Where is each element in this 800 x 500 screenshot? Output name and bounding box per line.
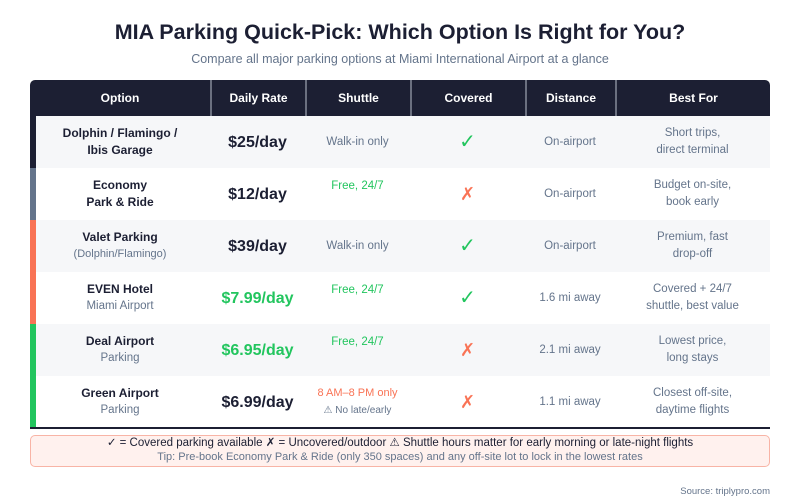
row: Deal Airport: Lowest price, <box>659 335 726 347</box>
row: Economy: Economy <box>93 178 147 192</box>
row: Green Airport: 8 AM–8 PM only <box>317 387 398 399</box>
row: Dolphin garage: On-airport <box>544 136 596 148</box>
row: Green Airport: $6.99/day <box>221 394 294 410</box>
row: EVEN Hotel: Miami Airport <box>86 300 154 312</box>
row: Dolphin garage: Short trips, <box>665 127 720 139</box>
row: Valet: On-airport <box>544 240 596 252</box>
row: Green Airport: daytime flights <box>656 404 729 416</box>
table header: Option <box>101 91 139 105</box>
legend footer <box>30 435 770 467</box>
row: EVEN Hotel <box>30 272 770 324</box>
row: Deal Airport: ✗ <box>460 340 475 360</box>
row: Valet: Walk-in only <box>326 240 389 252</box>
row: Valet: ✓ <box>459 234 476 256</box>
row: EVEN Hotel: ✓ <box>459 286 476 308</box>
title: MIA Parking Quick-Pick: Which Option Is Right for You? <box>115 20 685 44</box>
row: Valet: Valet Parking <box>82 230 158 244</box>
row: Dolphin garage: direct terminal <box>656 144 729 156</box>
row: Deal Airport: long stays <box>667 352 718 364</box>
table header: Distance <box>546 91 596 105</box>
row: Dolphin garage: Walk-in only <box>326 136 389 148</box>
row: Deal Airport: Parking <box>100 352 140 364</box>
row: Economy: ✗ <box>460 184 475 204</box>
row: EVEN Hotel: 1.6 mi away <box>539 292 601 304</box>
row: Green Airport: ⚠ No late/early <box>324 405 391 416</box>
row: Green Airport: Closest off-site, <box>653 387 732 399</box>
row: EVEN Hotel: Covered + 24/7 <box>653 283 732 295</box>
row: Green Airport: Green Airport <box>81 386 159 400</box>
table header: Best For <box>669 91 718 105</box>
row: Valet: drop-off <box>673 248 712 260</box>
row: Dolphin garage: $25/day <box>228 134 287 150</box>
row: Deal Airport: $6.95/day <box>221 342 294 358</box>
row: Deal Airport: Deal Airport <box>86 334 154 348</box>
row: Economy: Free, 24/7 <box>331 180 384 192</box>
row: Green Airport: ✗ <box>460 392 475 412</box>
table header <box>30 80 770 116</box>
row: Valet: Premium, fast <box>657 231 728 243</box>
row: Dolphin garage: Ibis Garage <box>87 143 153 157</box>
row: Green Airport: 1.1 mi away <box>539 396 601 408</box>
row: Economy: On-airport <box>544 188 596 200</box>
subtitle: Compare all major parking options at Miami International Airport at a glance <box>191 52 609 66</box>
row: Economy <box>30 168 770 220</box>
row: Valet: (Dolphin/Flamingo) <box>74 248 166 260</box>
row: Economy: Budget on-site, <box>654 179 731 191</box>
row: Deal Airport <box>30 324 770 376</box>
row: Green Airport <box>30 376 770 428</box>
legend footer: ✓ = Covered parking available ✗ = Uncovered/outdoor ⚠ Shuttle hours matter for early morning or late-night flights <box>107 437 693 449</box>
row: Valet: $39/day <box>228 238 287 254</box>
row: EVEN Hotel: $7.99/day <box>221 290 294 306</box>
row: Deal Airport: Free, 24/7 <box>331 336 384 348</box>
legend footer: Tip: Pre-book Economy Park & Ride (only 350 spaces) and any off-site lot to lock in the lowest rates <box>157 450 643 462</box>
row: Valet <box>30 220 770 272</box>
row: EVEN Hotel: shuttle, best value <box>646 300 739 312</box>
row: Dolphin garage: ✓ <box>459 130 476 152</box>
row: EVEN Hotel: Free, 24/7 <box>331 284 384 296</box>
row: Economy: $12/day <box>228 186 287 202</box>
row: Economy: book early <box>666 196 719 208</box>
row: Economy: Park & Ride <box>86 195 154 209</box>
table header: Covered <box>444 91 493 105</box>
row: Deal Airport: 2.1 mi away <box>539 344 601 356</box>
table header: Daily Rate <box>229 91 288 105</box>
row: Dolphin garage <box>30 116 770 168</box>
table header: Shuttle <box>338 91 379 105</box>
row: Dolphin garage: Dolphin / Flamingo / <box>63 126 177 140</box>
row: Green Airport: Parking <box>100 404 140 416</box>
row: EVEN Hotel: EVEN Hotel <box>87 282 153 296</box>
source: Source: triplypro.com <box>680 486 770 497</box>
